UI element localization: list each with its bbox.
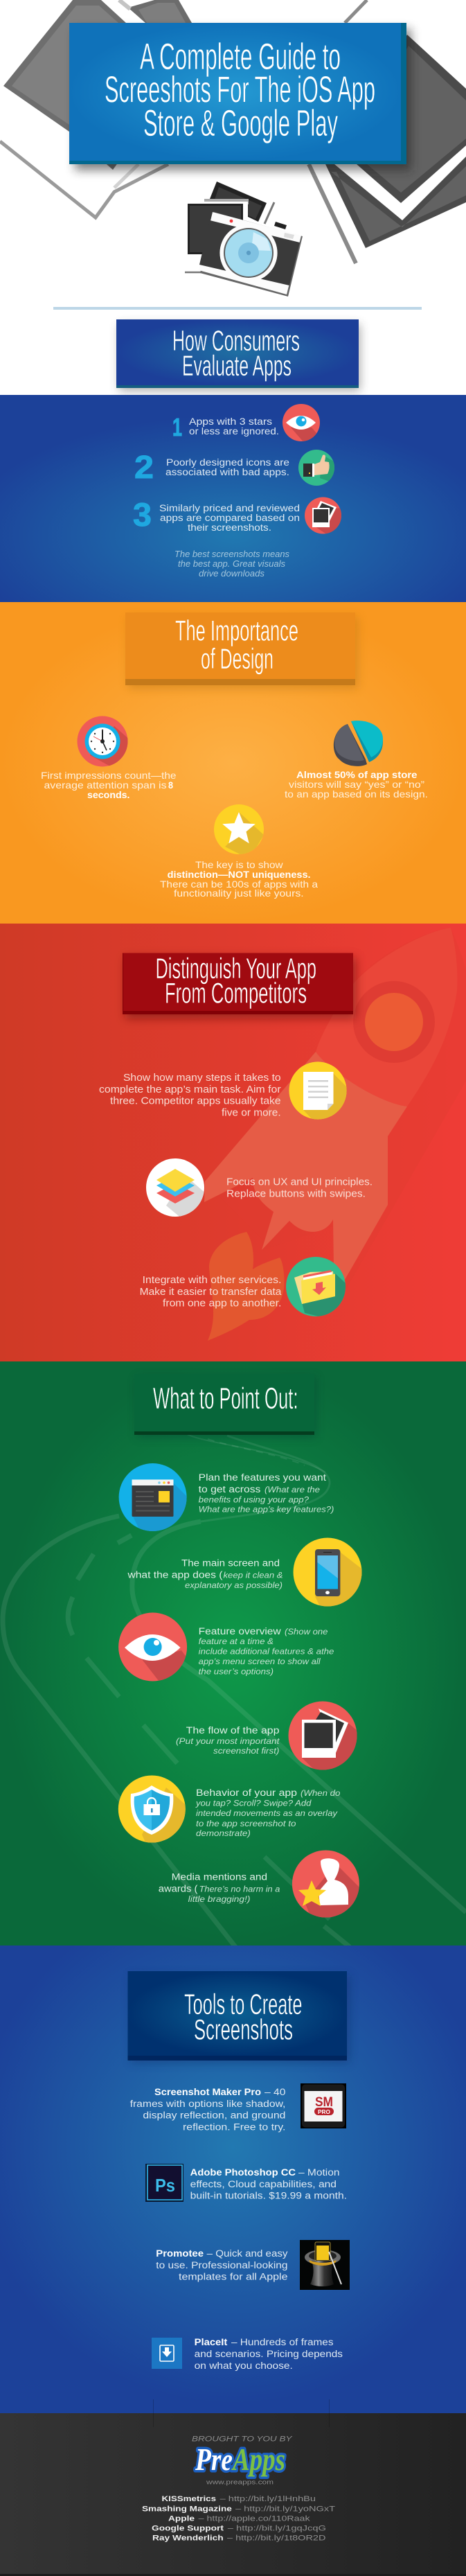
step: ux and ui: Replace buttons with swipes. (226, 1188, 366, 1199)
source list: – http://bit.ly/1t8OR2D (227, 2534, 325, 2543)
heading: what to point out (134, 1374, 316, 1437)
text: almost 50%: to an app based on its design. (285, 788, 428, 800)
text: first impressions: First impressions count—the (41, 770, 177, 781)
source list: – http://bit.ly/1yoNGxT (235, 2505, 335, 2513)
item: the main screen: The main screen and (181, 1558, 280, 1569)
text: key is distinction (160, 859, 318, 899)
decorative photo frames behind title (0, 0, 466, 263)
item: media mentions: Media mentions and (172, 1872, 267, 1882)
item: plan the features: Plan the features you want (199, 1472, 326, 1483)
heading: how consumers evaluate apps: How Consumers (172, 324, 300, 357)
text: almost 50%: visitors will say “yes” or “no” (289, 779, 424, 790)
item: behavior of your app: to the app screenshot to (196, 1819, 296, 1828)
step: steps count: complete the app’s main task. Aim for (99, 1084, 281, 1095)
tool: placeit: – Hundreds of frames (231, 2337, 334, 2347)
heading: distinguish your app: Distinguish Your App (155, 952, 316, 985)
heading: distinguish your app: From Competitors (165, 977, 307, 1009)
item: feature overview: include additional features & athe (199, 1646, 334, 1656)
icon: photoshop (145, 2164, 183, 2202)
item: flow of the app: screenshot first) (213, 1746, 279, 1756)
item: media mentions: little bragging!) (188, 1894, 250, 1904)
italic note (174, 549, 289, 579)
text: key is distinction: distinction—NOT uniqueness. (168, 869, 311, 880)
tool: promotee: templates for all Apple (179, 2272, 288, 2282)
item: feature overview: the user’s options) (199, 1666, 274, 1676)
heading: tools to create screenshots: Tools to Create (184, 1988, 302, 2020)
source list: – http://bit.ly/1lHnhBu (220, 2495, 316, 2503)
tool: screenshot maker pro (130, 2083, 346, 2133)
panel: what to point out (0, 1361, 466, 1947)
item: media mentions (159, 1850, 359, 1918)
panel: the importance of design (0, 602, 466, 924)
item 2: Poorly designed icons are (166, 457, 289, 468)
item: flow of the app (176, 1702, 357, 1770)
step: ux and ui: Focus on UX and UI principles. (226, 1176, 373, 1188)
tool: promotee (156, 2240, 350, 2290)
text: key is distinction: The key is to show (195, 859, 283, 870)
item 3: Similarly priced and reviewed (159, 503, 300, 513)
logo: preapps: Pre (195, 2442, 233, 2477)
item 1: or less are ignored. (189, 426, 279, 436)
step: integrate (140, 1257, 353, 1320)
tool: placeit: on what you choose. (195, 2361, 293, 2371)
icon: sm pro: PRO (318, 2108, 330, 2115)
website: www.preapps.com (206, 2479, 274, 2486)
item: flow of the app: The flow of the app (186, 1725, 279, 1736)
tool: screenshot maker pro: Screenshot Maker Pro (154, 2087, 261, 2097)
item: behavior of your app: intended movements as an overlay (196, 1808, 338, 1818)
item: flow of the app: (Put your most important (176, 1736, 280, 1746)
text: first impressions (41, 770, 177, 800)
item: the main screen: explanatory as possible) (185, 1580, 283, 1590)
source list: Ray Wenderlich (152, 2534, 224, 2543)
source list: – http://bit.ly/1gqJcqG (228, 2525, 326, 2533)
text: key is distinction: There can be 100s of apps with a (160, 879, 318, 890)
icon: sm pro: SM (315, 2095, 333, 2110)
item: plan the features: to get across (199, 1484, 261, 1494)
item 1: Apps with 3 stars (189, 416, 272, 427)
item 2 (134, 449, 339, 486)
item: plan the features (119, 1463, 334, 1531)
tool: promotee: Promotee (156, 2248, 204, 2259)
tool: adobe photoshop: Adobe Photoshop CC (190, 2167, 296, 2178)
heading: tools to create screenshots (127, 1971, 350, 2063)
item: feature overview: feature at a time & (199, 1637, 274, 1646)
tool: promotee: – Quick and easy (207, 2248, 288, 2259)
tool: placeit (152, 2337, 343, 2371)
item: the main screen: keep it clean & (223, 1571, 283, 1580)
item 3: 3 (133, 496, 152, 533)
road illustration (3, 1434, 466, 1947)
icon: clock (78, 716, 127, 766)
logo: preapps: Apps (231, 2442, 285, 2477)
item: media mentions: awards ( (159, 1884, 198, 1894)
item: behavior of your app: Behavior of your app (196, 1788, 297, 1798)
text: first impressions: 8 (168, 779, 173, 791)
item: behavior of your app: (When do (301, 1788, 341, 1798)
icon: photoshop: Ps (155, 2175, 175, 2196)
divider line (53, 307, 422, 310)
item 2: 2 (134, 449, 154, 485)
panel: distinguish your app (0, 924, 466, 1361)
icon: camera with photos (185, 182, 303, 297)
item: behavior of your app: demonstrate) (196, 1828, 251, 1838)
text: first impressions: seconds. (87, 789, 130, 800)
title banner (69, 23, 411, 170)
step: integrate: Make it easier to transfer data (140, 1286, 282, 1298)
item: plan the features: (What are the (265, 1485, 320, 1494)
item: plan the features: What are the app’s key features?) (199, 1505, 334, 1515)
item 2: associated with bad apps. (165, 467, 289, 477)
step: integrate: from one app to another. (163, 1298, 281, 1309)
tool: placeit: and scenarios. Pricing depends (195, 2349, 343, 2359)
panel: footer (0, 2399, 466, 2576)
italic note: the best app. Great visuals (178, 559, 285, 569)
tool: adobe photoshop: built-in tutorials. $19.99 a month. (190, 2191, 347, 2200)
source list: Apple (168, 2514, 195, 2523)
tool: screenshot maker pro: – 40 (265, 2087, 285, 2097)
item: the main screen (127, 1538, 367, 1611)
icon: sm pro (301, 2083, 346, 2128)
heading: tools to create screenshots: Screenshots (194, 2013, 293, 2045)
logo: preapps (195, 2442, 285, 2477)
item 1 (172, 404, 325, 443)
text: almost 50% (285, 769, 428, 800)
item: the main screen: what the app does ( (127, 1570, 223, 1580)
item: feature overview: (Show one (285, 1627, 328, 1637)
step: steps count: Show how many steps it takes to (123, 1072, 281, 1084)
rocket illustration (201, 928, 466, 1341)
step: steps count (99, 1061, 353, 1122)
tool: screenshot maker pro: display reflection, and ground (143, 2110, 285, 2121)
text: key is distinction: functionality just like yours. (174, 888, 304, 899)
tool: screenshot maker pro: frames with options like shadow, (130, 2099, 285, 2109)
source list: – http://apple.co/110Raak (199, 2514, 310, 2523)
italic note: drive downloads (199, 569, 265, 579)
item: behavior of your app (118, 1775, 341, 1850)
tool: adobe photoshop (145, 2164, 347, 2202)
item 3: their screenshots. (188, 522, 271, 533)
item 1: 1 (172, 413, 182, 441)
icon: top hat with phone (300, 2240, 350, 2290)
panel: how consumers evaluate apps (0, 395, 466, 602)
item 3 (133, 496, 341, 533)
item: feature overview (118, 1613, 334, 1681)
item: feature overview: app’s menu screen to show all (199, 1657, 321, 1666)
heading: how consumers evaluate apps (116, 319, 360, 391)
icon: placeit (152, 2338, 182, 2369)
brought to you by: BROUGHT TO YOU BY (192, 2435, 292, 2444)
source list: Smashing Magazine (142, 2505, 232, 2513)
heading: what to point out: What to Point Out: (153, 1382, 298, 1415)
tool: screenshot maker pro: reflection. Free to try. (183, 2122, 285, 2133)
tool: promotee: to use. Professional-looking (156, 2260, 288, 2270)
tool: adobe photoshop: effects, Cloud capabilities, and (190, 2179, 337, 2189)
heading: the importance of design: of Design (201, 642, 274, 675)
tool: placeit: PlaceIt (195, 2337, 228, 2347)
item: media mentions: There’s no harm in a (199, 1885, 280, 1894)
step: steps count: five or more. (222, 1106, 281, 1118)
tool: adobe photoshop: – Motion (298, 2167, 339, 2178)
italic note: The best screenshots means (174, 549, 289, 559)
text: first impressions: average attention span is (44, 779, 166, 791)
step: steps count: three. Competitor apps usually take (110, 1095, 281, 1107)
step: integrate: Integrate with other services. (143, 1274, 281, 1286)
step: ux and ui (146, 1158, 373, 1223)
item 3: apps are compared based on (160, 513, 300, 523)
text: almost 50%: Almost 50% of app store (296, 769, 418, 780)
heading: how consumers evaluate apps: Evaluate Apps (182, 349, 292, 382)
heading: the importance of design (125, 612, 358, 689)
item: feature overview: Feature overview (199, 1626, 281, 1637)
panel: tools to create screenshots (0, 1946, 466, 2413)
source list (142, 2495, 335, 2543)
icon: star (214, 804, 264, 859)
item: plan the features: benefits of using your app? (199, 1494, 309, 1504)
heading: distinguish your app (123, 952, 356, 1018)
icon: pie chart (334, 721, 383, 766)
source list: Google Support (152, 2525, 224, 2533)
item: behavior of your app: you tap? Scroll? Swipe? Add (195, 1799, 312, 1808)
heading: the importance of design: The Importance (175, 614, 298, 647)
source list: KISSmetrics (162, 2495, 216, 2503)
